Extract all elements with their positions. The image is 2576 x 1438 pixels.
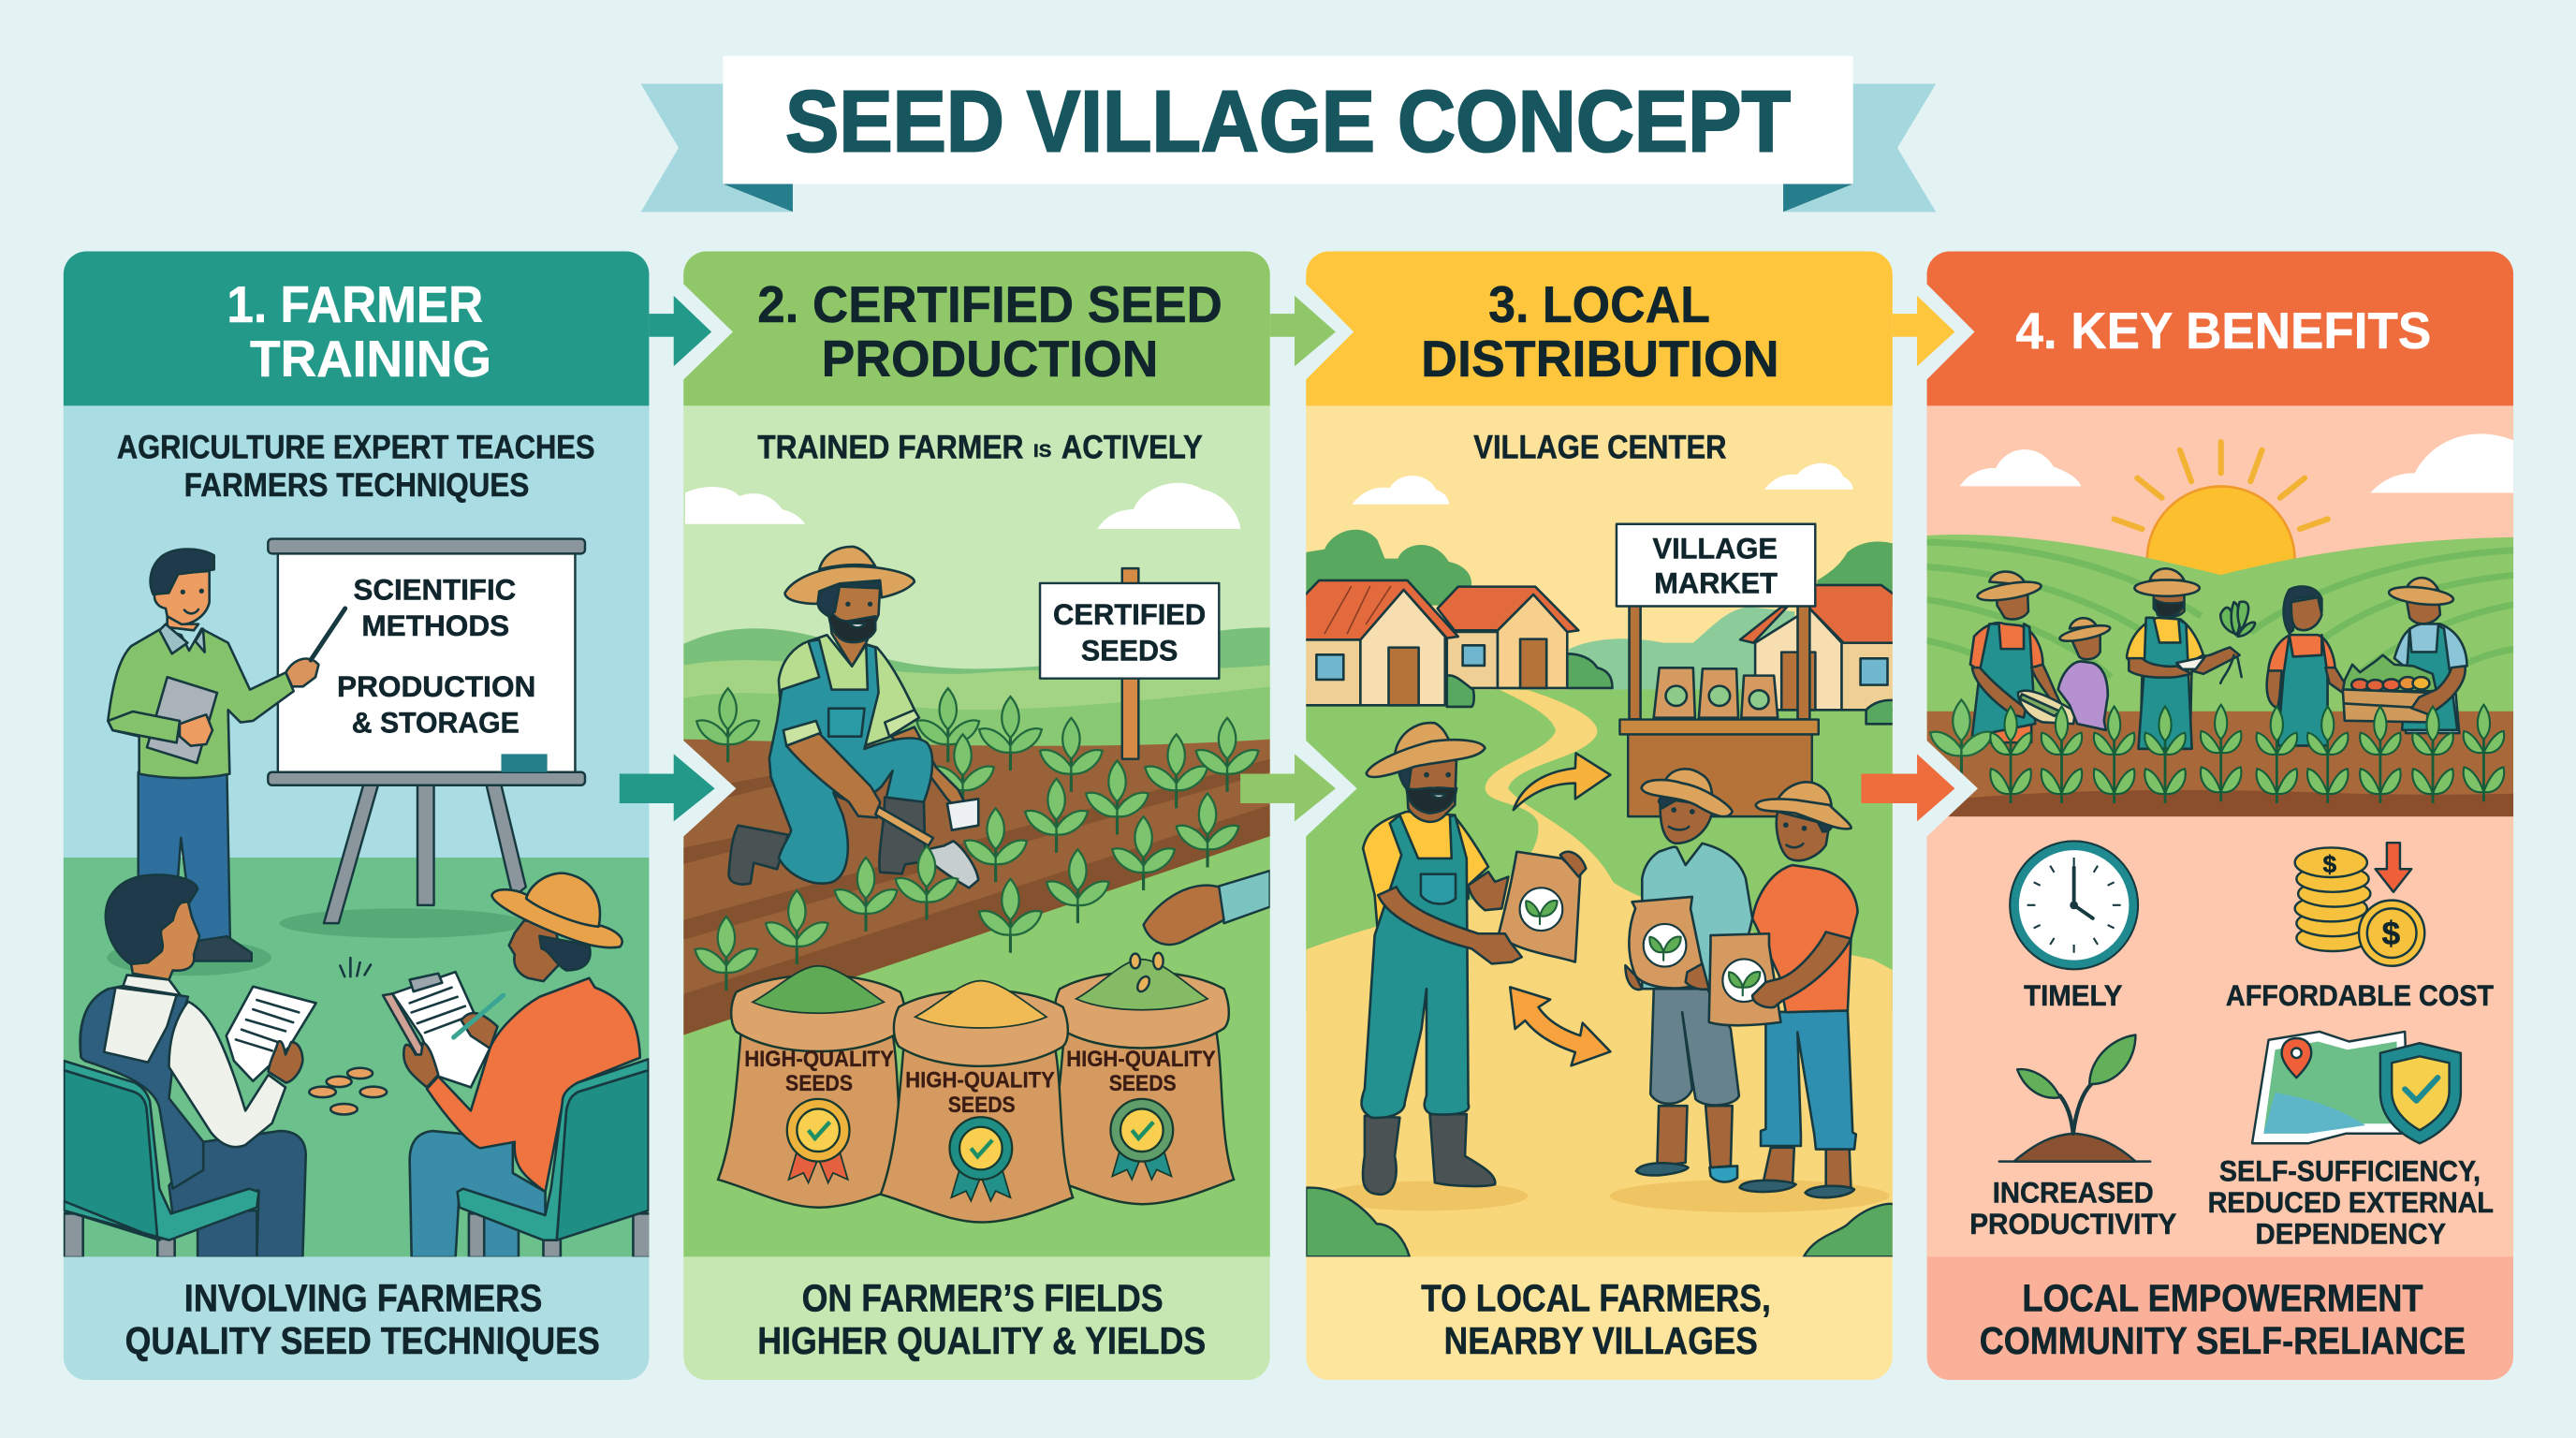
- panel 2 card: [683, 251, 1270, 1380]
- village market sign and counter: [1617, 524, 1819, 816]
- panel 2 heading: 2. CERTIFIED SEED: [757, 276, 1222, 333]
- hills: [683, 627, 1270, 772]
- presentation board: & STORAGE: [352, 706, 520, 740]
- stall bags: [1654, 668, 1778, 718]
- woman farmer: [2267, 586, 2352, 745]
- arrow 1 lower: [620, 754, 715, 821]
- panel 2 top text: IS: [1033, 442, 1051, 462]
- arrow notches: [681, 281, 1978, 840]
- clouds: [1352, 476, 1449, 505]
- village market sign and counter: MARKET: [1654, 565, 1778, 599]
- benefit: self-sufficiency: SELF-SUFFICIENCY,: [2219, 1154, 2481, 1188]
- panel 2 heading: PRODUCTION: [822, 330, 1158, 388]
- panel 4: key benefits: [1927, 251, 2515, 1380]
- panel 4 illustration: [1927, 405, 2515, 1258]
- kneeling farmer: [729, 547, 978, 888]
- ribbon left tail: [641, 83, 792, 212]
- icon: map and shield: [2252, 1032, 2461, 1143]
- sack left: HIGH-QUALITY: [744, 1048, 894, 1072]
- title banner: [641, 56, 1936, 212]
- benefit: timely: [2010, 841, 2138, 1012]
- bushes: [1567, 653, 1612, 688]
- arrow 2 lower: [1240, 754, 1336, 821]
- certified seeds sign: [1040, 568, 1219, 759]
- curved arrow: [1514, 753, 1610, 810]
- benefit: increased productivity: PRODUCTIVITY: [1969, 1207, 2176, 1240]
- teacher: [139, 772, 252, 969]
- panel 1 top text: FARMERS TECHNIQUES: [184, 467, 529, 504]
- arrow 1 top: [649, 296, 711, 366]
- village scene: [1302, 530, 1896, 1011]
- trees: [1306, 530, 1471, 606]
- arrow 2 top: [1270, 296, 1336, 366]
- teacher upper body: [108, 550, 345, 778]
- presentation board: [268, 539, 585, 785]
- panel 2 footer text: [757, 1276, 1206, 1362]
- arrows between panels: [620, 281, 1978, 840]
- farmer with bag: [1362, 723, 1586, 1195]
- panel 3 top text: VILLAGE CENTER: [1473, 430, 1727, 466]
- arrow 3 lower: [1861, 754, 1954, 821]
- road and ground: [1306, 690, 1894, 1258]
- sack right: [1042, 960, 1234, 1204]
- panel 3 header: [1306, 251, 1893, 405]
- benefit: self-sufficiency: [2208, 1032, 2494, 1250]
- icon: coins: [2295, 843, 2424, 966]
- people and bags: [1362, 723, 1858, 1197]
- benefit: affordable cost: [2226, 843, 2494, 1012]
- ribbon fold right: [1783, 184, 1853, 212]
- panel 4 footer text: COMMUNITY SELF-RELIANCE: [1980, 1319, 2466, 1362]
- soil: [1927, 712, 2515, 816]
- panel 3 footer text: TO LOCAL FARMERS,: [1421, 1276, 1771, 1319]
- village market sign and counter: VILLAGE: [1653, 532, 1778, 565]
- bushes foreground: [1306, 1188, 1410, 1256]
- benefit: increased productivity: [1969, 1034, 2176, 1240]
- panel 3 heading: DISTRIBUTION: [1421, 330, 1779, 388]
- sacks with badges: [718, 960, 1234, 1223]
- panel 1 top text: [117, 430, 595, 504]
- title plate: [723, 56, 1853, 184]
- panel 3 heading: [1421, 276, 1779, 388]
- panel 2 footer text: HIGHER QUALITY & YIELDS: [757, 1319, 1206, 1362]
- villager one: [1625, 769, 1752, 1181]
- panel 1 heading: TRAINING: [250, 330, 491, 388]
- panel 2 illustration: [683, 405, 1271, 1258]
- panel 1 footer text: QUALITY SEED TECHNIQUES: [125, 1319, 600, 1362]
- house 1: [1304, 639, 1360, 705]
- clouds: [1960, 449, 2082, 486]
- panel 2 footer text: ON FARMER’S FIELDS: [802, 1276, 1164, 1319]
- panel 3: local distribution: [1302, 251, 1896, 1380]
- double arrow: [1510, 987, 1610, 1065]
- title text: SEED VILLAGE CONCEPT: [785, 72, 1791, 169]
- farmer 5: [2343, 578, 2466, 733]
- grass tuft: [340, 958, 371, 976]
- seated farmer left: [64, 874, 316, 1257]
- panel 2 top text: ACTIVELY: [1061, 430, 1203, 466]
- panel 1 header: [64, 251, 649, 405]
- benefit: affordable cost: AFFORDABLE COST: [2226, 978, 2494, 1012]
- panel 2 top text: [757, 430, 1203, 466]
- farm fields: [1927, 535, 2515, 723]
- benefit: self-sufficiency: DEPENDENCY: [2256, 1216, 2446, 1250]
- sack middle: SEEDS: [948, 1093, 1016, 1118]
- panel 3 footer text: NEARBY VILLAGES: [1444, 1319, 1758, 1362]
- foreground seedlings: [896, 846, 958, 920]
- panel 2 header: [683, 251, 1270, 405]
- seated farmer right: [383, 873, 651, 1257]
- farmers group: [1970, 568, 2466, 749]
- stall posts: [1630, 606, 1641, 719]
- sack middle: HIGH-QUALITY: [905, 1069, 1055, 1093]
- benefit: self-sufficiency: REDUCED EXTERNAL: [2208, 1185, 2494, 1219]
- crop plants row: [1930, 700, 2504, 803]
- arrow 3 top: [1893, 296, 1954, 366]
- panel 4 header: [1927, 251, 2513, 405]
- panel 1 illustration: [63, 405, 651, 1258]
- sack left: SEEDS: [785, 1072, 853, 1096]
- certified seeds sign: CERTIFIED: [1053, 597, 1206, 631]
- panel 1: farmer training: [63, 251, 651, 1380]
- sack right: SEEDS: [1109, 1072, 1177, 1096]
- panel 4 heading: 4. KEY BENEFITS: [2015, 302, 2431, 360]
- seated farmers: [64, 873, 651, 1257]
- certified seeds sign: SEEDS: [1081, 633, 1178, 667]
- panel 3 card: [1306, 251, 1893, 1380]
- house 3: [1755, 609, 1841, 710]
- sack middle: [881, 981, 1073, 1223]
- panel 3 footer text: [1421, 1276, 1771, 1362]
- clouds: [685, 487, 805, 524]
- panel 1 heading: [227, 276, 491, 388]
- benefit: timely: TIMELY: [2024, 978, 2122, 1012]
- seeds on ground: [309, 1068, 387, 1114]
- farmer 3: [2127, 568, 2255, 749]
- sun: [2115, 442, 2328, 634]
- soil rows: [683, 740, 1270, 1034]
- seedling: [2220, 602, 2255, 683]
- sack right: HIGH-QUALITY: [1066, 1048, 1216, 1072]
- panel 3 heading: 3. LOCAL: [1488, 276, 1710, 333]
- panel 4 footer text: [1980, 1276, 2466, 1362]
- seedlings: [695, 688, 1258, 990]
- panel 1 top text: AGRICULTURE EXPERT TEACHES: [117, 430, 595, 466]
- farmer 1: [1970, 572, 2075, 742]
- villager two: [1709, 782, 1858, 1197]
- panel 1 card: [64, 251, 649, 1380]
- panel 4 footer text: LOCAL EMPOWERMENT: [2022, 1276, 2423, 1319]
- panel 2 top text: TRAINED FARMER: [757, 430, 1023, 466]
- presentation board: METHODS: [361, 609, 509, 642]
- panel 3 illustration: [1302, 405, 1896, 1258]
- house 2: [1447, 632, 1498, 688]
- presentation board: PRODUCTION: [337, 669, 535, 703]
- hand dropping seeds: [1131, 871, 1270, 993]
- ribbon fold left: [723, 184, 793, 212]
- benefit: increased productivity: INCREASED: [1993, 1175, 2154, 1209]
- panel 1 footer text: [125, 1276, 600, 1362]
- ground: [1302, 690, 1896, 1011]
- icon: coins: $: [2382, 916, 2401, 952]
- panel 1 heading: 1. FARMER: [227, 276, 483, 333]
- icon: coins: $: [2322, 850, 2336, 878]
- panel 2 heading: [757, 276, 1222, 388]
- icon: sprout: [1999, 1034, 2150, 1162]
- icon: clock: [2010, 841, 2138, 969]
- presentation board: SCIENTIFIC: [354, 572, 516, 606]
- sack left: [718, 966, 910, 1208]
- child: [2058, 618, 2112, 730]
- panel 4 card: [1927, 251, 2513, 1380]
- ribbon right tail: [1784, 83, 1936, 212]
- panel 2: certified seed production: [683, 251, 1271, 1380]
- easel legs: [324, 785, 526, 923]
- panel 1 footer text: INVOLVING FARMERS: [184, 1276, 542, 1319]
- vegetable crate: [2343, 655, 2437, 722]
